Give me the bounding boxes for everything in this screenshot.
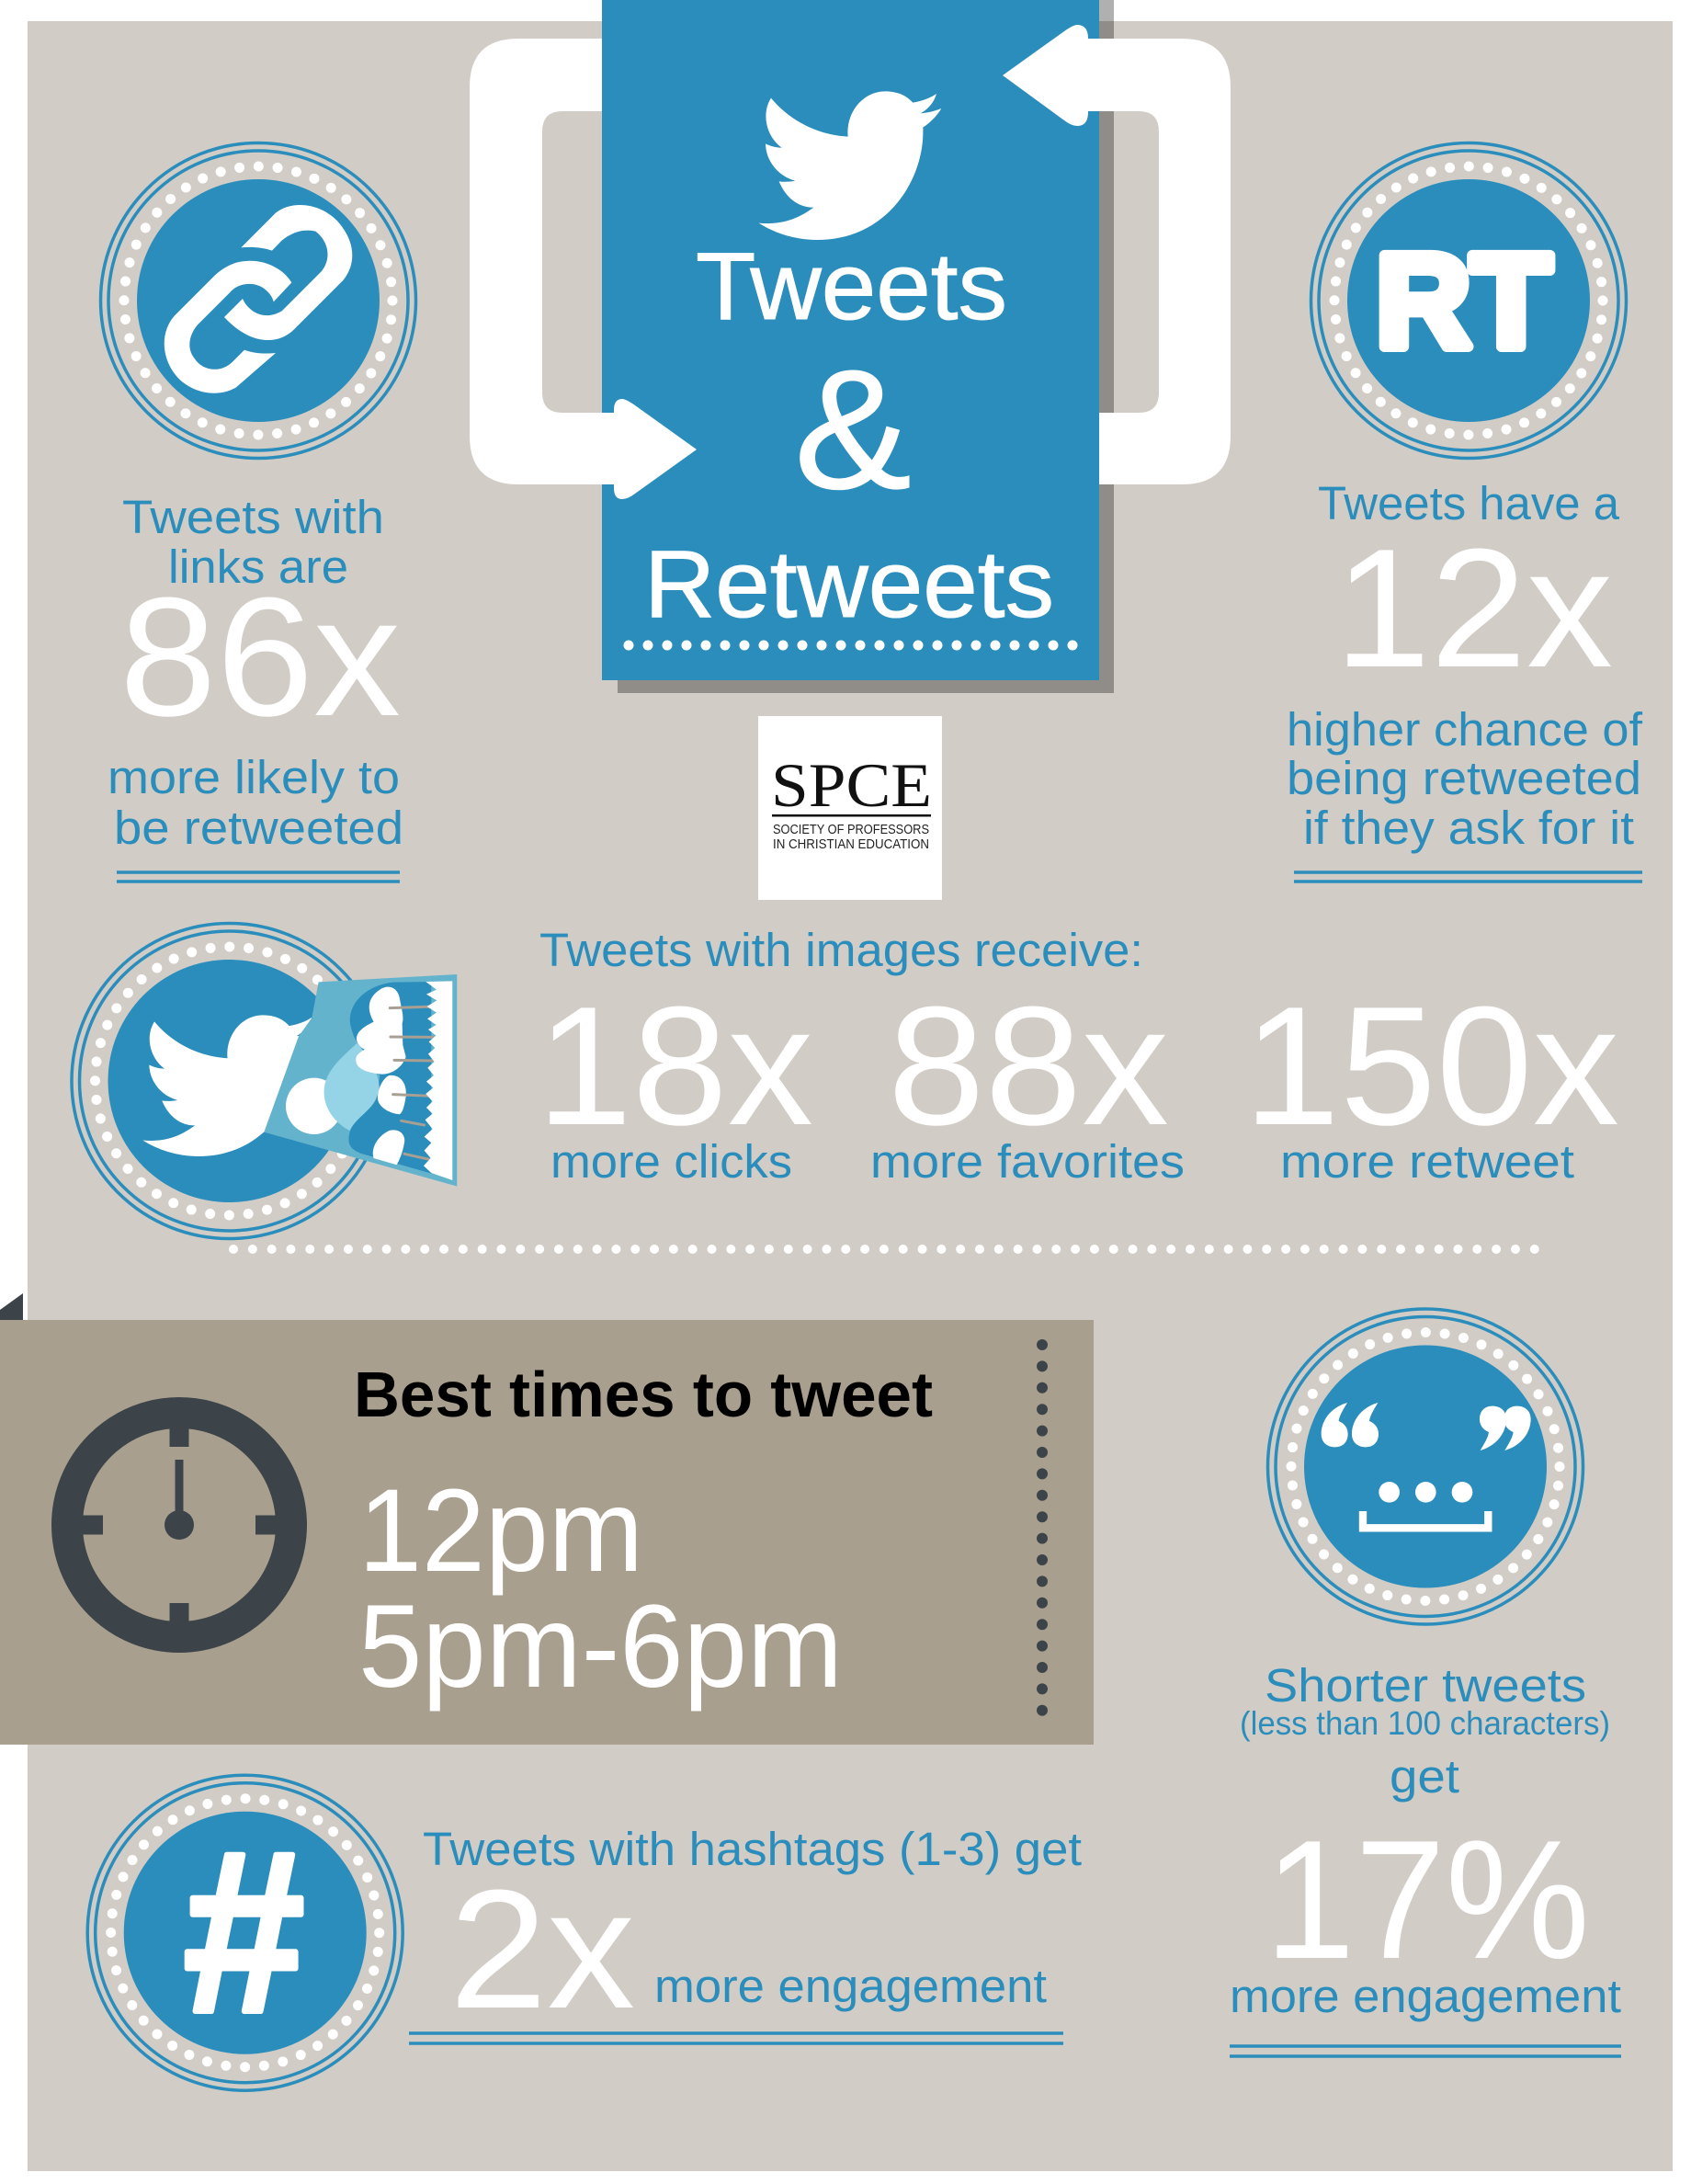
icon: quote marks and ellipsis	[1322, 1403, 1531, 1528]
text block: hashtags stat: more engagement	[654, 1960, 1047, 2012]
number: 2x: 2x	[449, 1854, 635, 2043]
title: Tweets: Tweets	[696, 233, 1007, 340]
logo: SPCE: SOCIETY OF PROFESSORS	[773, 822, 929, 837]
badge: bird and image	[72, 923, 457, 1239]
text block: links stat: more likely to	[108, 751, 400, 803]
number: 17%: 17%	[1265, 1804, 1590, 1994]
text block: images stats	[537, 924, 1619, 1188]
heading: best times: Best times to tweet	[354, 1359, 933, 1430]
panel: best times band	[0, 1320, 1094, 1745]
text block: links stat: Tweets with	[122, 491, 384, 543]
number: 150x: 150x	[1243, 971, 1619, 1160]
icon: chain link	[165, 205, 352, 393]
logo: SPCE	[758, 716, 942, 900]
title banner	[602, 0, 1099, 680]
icon: twitter bird small	[142, 1015, 316, 1156]
title: ampersand: &	[794, 336, 912, 525]
text: 5pm-6pm: 5pm-6pm	[358, 1581, 843, 1712]
text block: shorter tweets stat: (less than 100 characters)	[1240, 1704, 1610, 1742]
text block: ask for retweet stat: being retweeted	[1287, 752, 1641, 804]
arrow: left loop arrow	[470, 39, 697, 499]
number: 12x: 12x	[1334, 513, 1613, 702]
badge: link icon	[101, 143, 415, 458]
title banner shadow	[618, 0, 1114, 693]
number: 18x: 18x	[537, 971, 813, 1160]
corner triangle	[0, 1293, 23, 1321]
text block: images stats: Tweets with images receive:	[539, 924, 1143, 976]
text block: links stat	[108, 491, 403, 882]
text block: shorter tweets stat	[1230, 1659, 1621, 2056]
arrow: right loop arrow	[1003, 25, 1231, 484]
icon: clock	[67, 1413, 291, 1637]
icon: image picture	[264, 974, 457, 1187]
logo: SPCE: IN CHRISTIAN EDUCATION	[773, 836, 929, 852]
text block: images stats: more retweet	[1280, 1135, 1574, 1188]
number: 88x: 88x	[888, 971, 1169, 1160]
badge: hashtag icon	[87, 1775, 403, 2090]
badge: quote icon	[1268, 1309, 1583, 1624]
text block: links stat: be retweeted	[114, 802, 403, 854]
text block: hashtags stat: Tweets with hashtags (1-3) get	[423, 1823, 1082, 1875]
title: Retweets: Retweets	[644, 531, 1054, 638]
text block: ask for retweet stat	[1287, 477, 1643, 882]
logo: SPCE: SPCE	[771, 750, 932, 820]
text block: shorter tweets stat: Shorter tweets	[1265, 1659, 1586, 1712]
text block: images stats: more clicks	[550, 1135, 792, 1188]
icon: twitter bird	[759, 91, 941, 240]
text block: ask for retweet stat: Tweets have a	[1318, 477, 1620, 529]
text block: shorter tweets stat: get	[1390, 1750, 1459, 1803]
text block: ask for retweet stat: higher chance of	[1287, 703, 1643, 756]
text: 12pm: 12pm	[358, 1465, 643, 1597]
icon: RT letters: RT	[1376, 227, 1551, 375]
number: 86x: 86x	[119, 562, 401, 751]
text block: hashtags stat	[409, 1823, 1082, 2043]
text block: shorter tweets stat: more engagement	[1230, 1970, 1621, 2022]
icon: hash symbol: #	[180, 1803, 301, 2060]
text block: links stat: links are	[168, 540, 348, 593]
text block: ask for retweet stat: if they ask for it	[1303, 802, 1634, 854]
badge: RT icon	[1311, 143, 1627, 458]
text block: images stats: more favorites	[870, 1135, 1185, 1188]
